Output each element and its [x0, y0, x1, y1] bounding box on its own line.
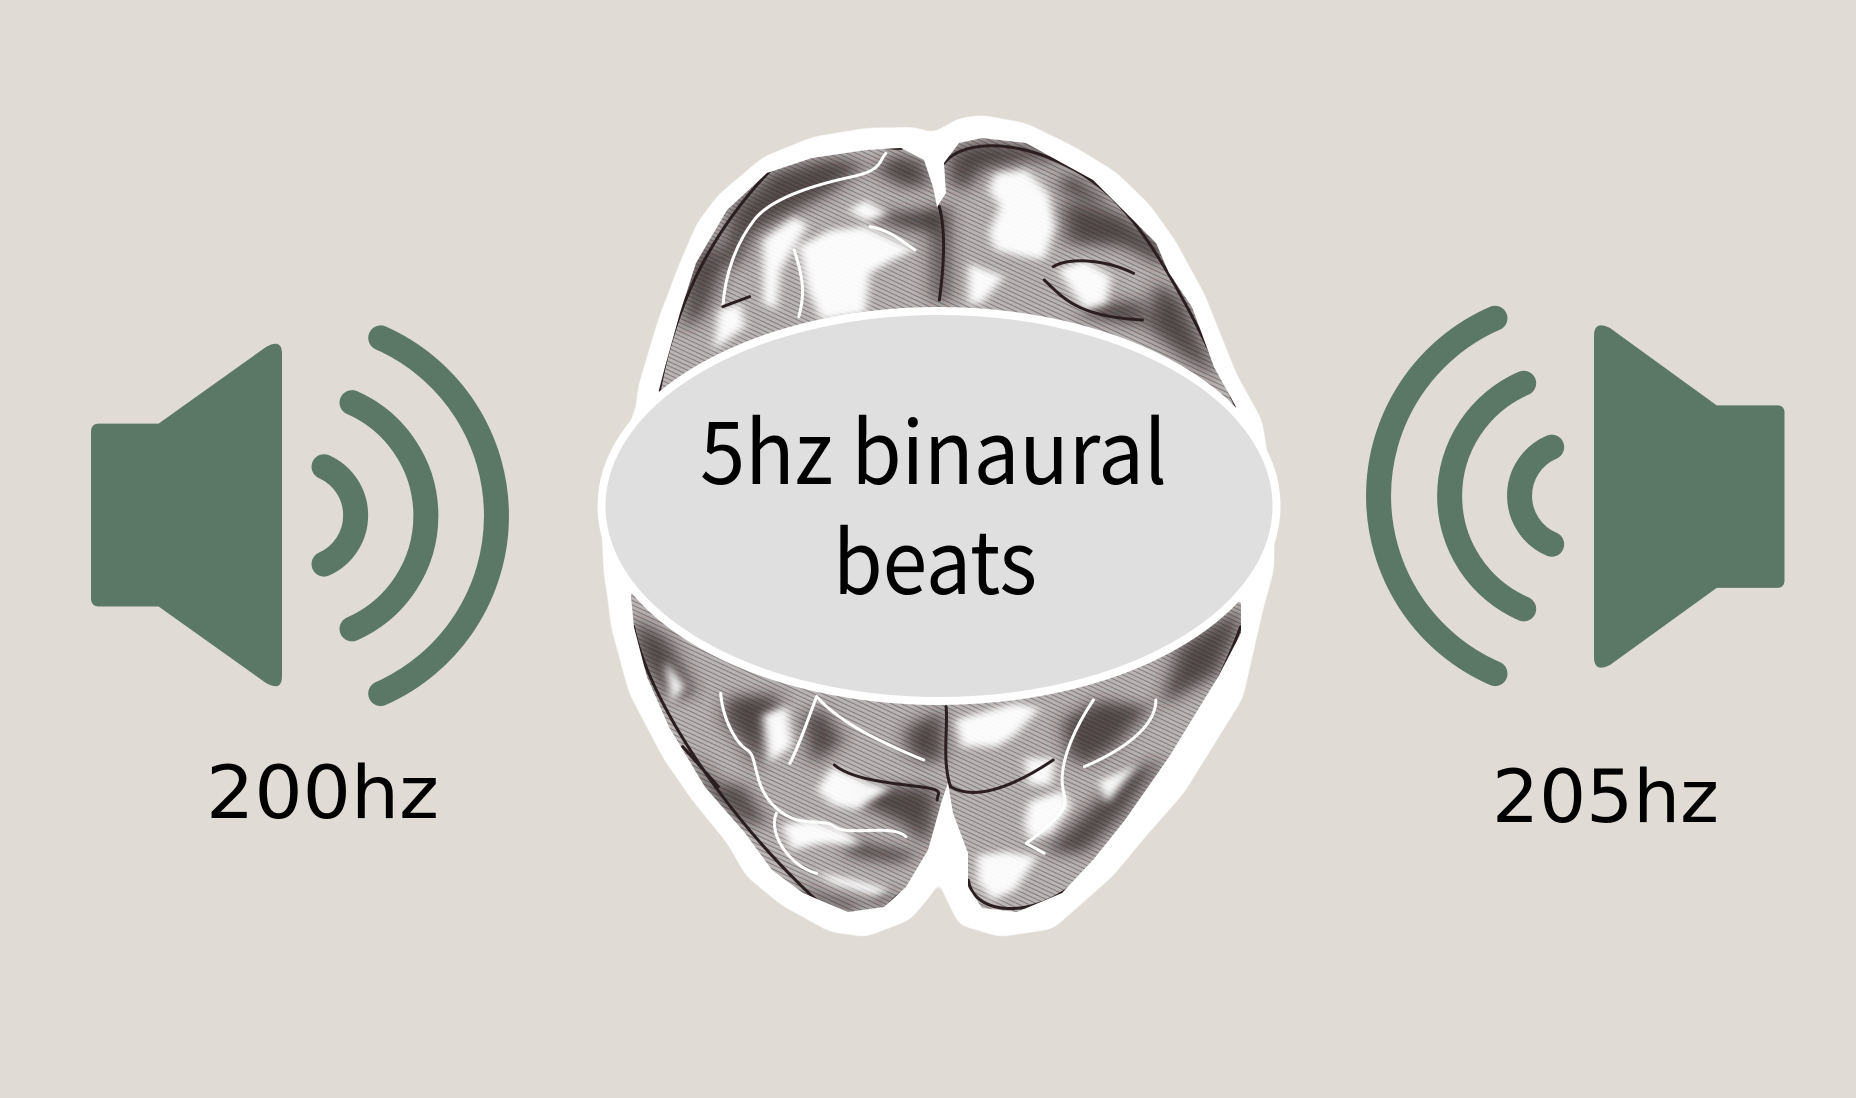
central ellipse with title	[602, 311, 1276, 701]
bottom half dark tones	[634, 607, 1241, 912]
sticker outline	[600, 115, 1275, 937]
icon: right speaker	[1379, 318, 1784, 674]
engraving hatch	[620, 130, 1260, 930]
icon: left speaker	[91, 338, 496, 694]
illustration: brain with white sticker outline	[600, 115, 1275, 937]
bottom half highlights and sulci	[634, 627, 1241, 930]
title: 5hz binaural	[700, 384, 1167, 510]
infographic canvas	[91, 116, 1784, 936]
label: 200hz: 200hz	[206, 751, 439, 836]
ellipse	[602, 311, 1276, 701]
brain base tone	[620, 130, 1260, 930]
top half dark tones	[683, 142, 1218, 380]
label: 205hz: 205hz	[1492, 755, 1719, 840]
title: beats	[833, 494, 1037, 620]
top half highlights and sulci	[659, 136, 1236, 407]
